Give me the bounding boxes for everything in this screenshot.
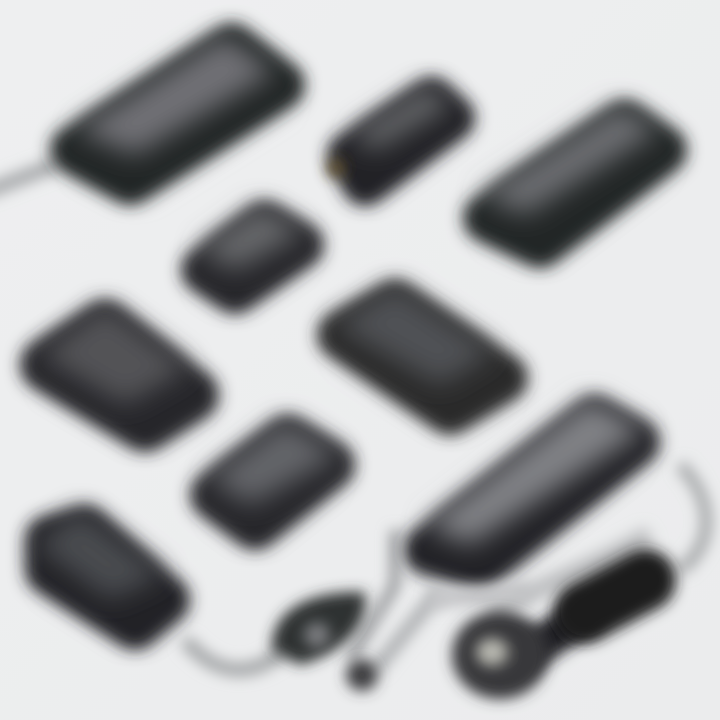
device 4 (198, 205, 305, 300)
device 3 (480, 105, 662, 255)
cable loop: right (466, 465, 706, 685)
cable loop: center (185, 530, 530, 691)
device 5 (335, 285, 503, 422)
device 8 (35, 510, 165, 637)
cable: top left (0, 165, 55, 192)
device 6 (40, 305, 192, 438)
device 7 (208, 420, 340, 537)
device 2 (327, 85, 452, 193)
device 9 (425, 398, 645, 577)
device 1 (75, 35, 285, 195)
